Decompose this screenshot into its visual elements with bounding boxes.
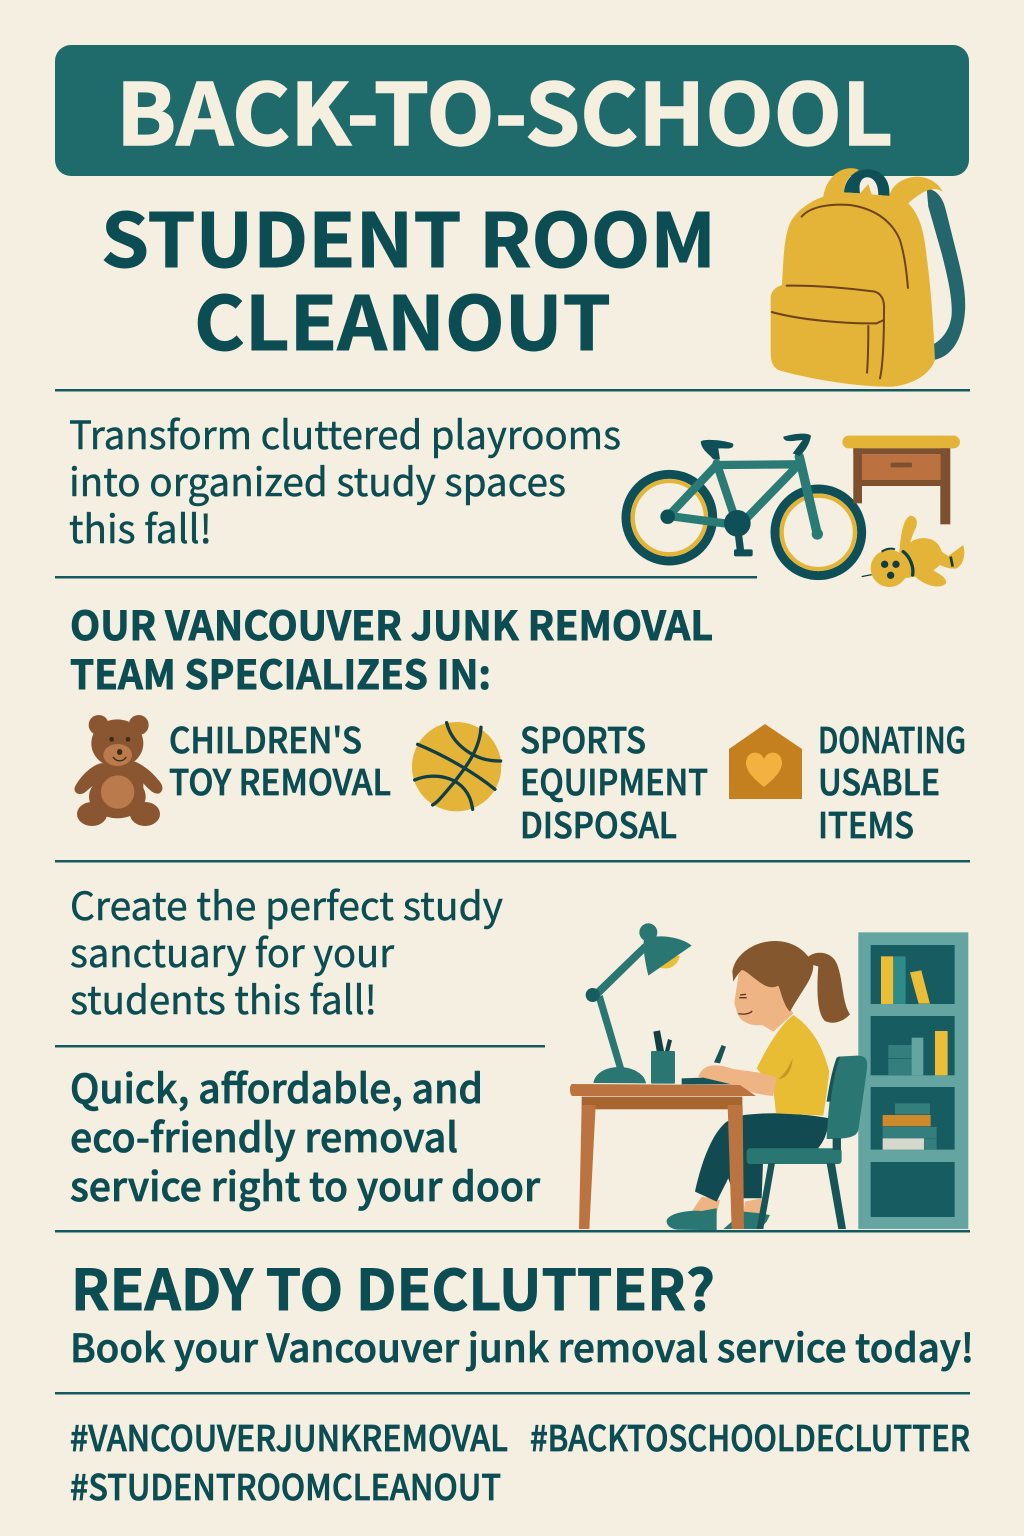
- divider: [55, 576, 757, 578]
- book on desk: [682, 1078, 732, 1084]
- student: [667, 941, 850, 1230]
- hashtags: #VANCOUVERJUNKREMOVAL: [70, 1411, 508, 1462]
- subtitle: [101, 182, 716, 372]
- services heading: [70, 594, 713, 701]
- intro text: Transform cluttered playrooms: [69, 405, 621, 461]
- services heading: TEAM SPECIALIZES IN:: [70, 643, 491, 701]
- desk lamp: [586, 923, 692, 1083]
- hashtags: [70, 1411, 970, 1511]
- divider: [55, 389, 970, 392]
- subtitle: CLEANOUT: [194, 265, 611, 372]
- desk: [570, 1084, 756, 1229]
- call to action: READY TO DECLUTTER?: [71, 1246, 715, 1327]
- icon: bicycle: [626, 434, 862, 576]
- hashtags: #BACKTOSCHOOLDECLUTTER: [530, 1411, 970, 1462]
- study sanctuary text: sanctuary for your: [70, 923, 395, 979]
- service description text: Quick, affordable, and: [70, 1057, 483, 1115]
- call to action: Book your Vancouver junk removal service today!: [70, 1318, 974, 1374]
- header banner: [55, 45, 969, 176]
- illustration: student studying at desk: [570, 923, 968, 1230]
- divider: [55, 1392, 970, 1394]
- icon: backpack: [771, 168, 965, 387]
- intro text: [69, 405, 621, 555]
- icon: donation house: [729, 724, 802, 799]
- sports equipment label: [520, 713, 708, 849]
- icon: fallen stuffed toy: [862, 516, 964, 587]
- toy removal label: [169, 713, 391, 806]
- donating label: ITEMS: [818, 798, 914, 849]
- service description text: [70, 1057, 541, 1213]
- service description text: service right to your door: [70, 1155, 541, 1213]
- hashtags: #STUDENTROOMCLEANOUT: [70, 1460, 501, 1511]
- icon: teddy bear: [74, 715, 162, 826]
- donating label: USABLE: [818, 755, 940, 806]
- study sanctuary text: [70, 876, 503, 1026]
- pen cup: [651, 1030, 675, 1084]
- toy removal label: TOY REMOVAL: [169, 755, 391, 806]
- donating label: [818, 713, 966, 849]
- sports equipment label: EQUIPMENT: [520, 755, 708, 806]
- service description text: eco-friendly removal: [70, 1106, 458, 1164]
- divider: [55, 1045, 545, 1048]
- chair: [747, 1056, 867, 1229]
- call to action: [70, 1246, 974, 1374]
- services heading: OUR VANCOUVER JUNK REMOVAL: [70, 594, 713, 652]
- sports equipment label: SPORTS: [520, 713, 646, 764]
- subtitle: STUDENT ROOM: [101, 182, 716, 289]
- divider: [55, 860, 970, 862]
- intro text: into organized study spaces: [69, 452, 566, 508]
- icon: basketball: [412, 722, 501, 811]
- donating label: DONATING: [818, 713, 966, 764]
- sports equipment label: DISPOSAL: [520, 798, 677, 849]
- divider: [55, 1230, 970, 1232]
- banner title: BACK-TO-SCHOOL: [116, 47, 893, 170]
- bookshelf: [858, 932, 968, 1229]
- toy removal label: CHILDREN'S: [169, 713, 362, 764]
- study sanctuary text: Create the perfect study: [70, 876, 503, 932]
- icon: side table: [842, 436, 960, 524]
- intro text: this fall!: [69, 499, 212, 555]
- study sanctuary text: students this fall!: [70, 970, 377, 1026]
